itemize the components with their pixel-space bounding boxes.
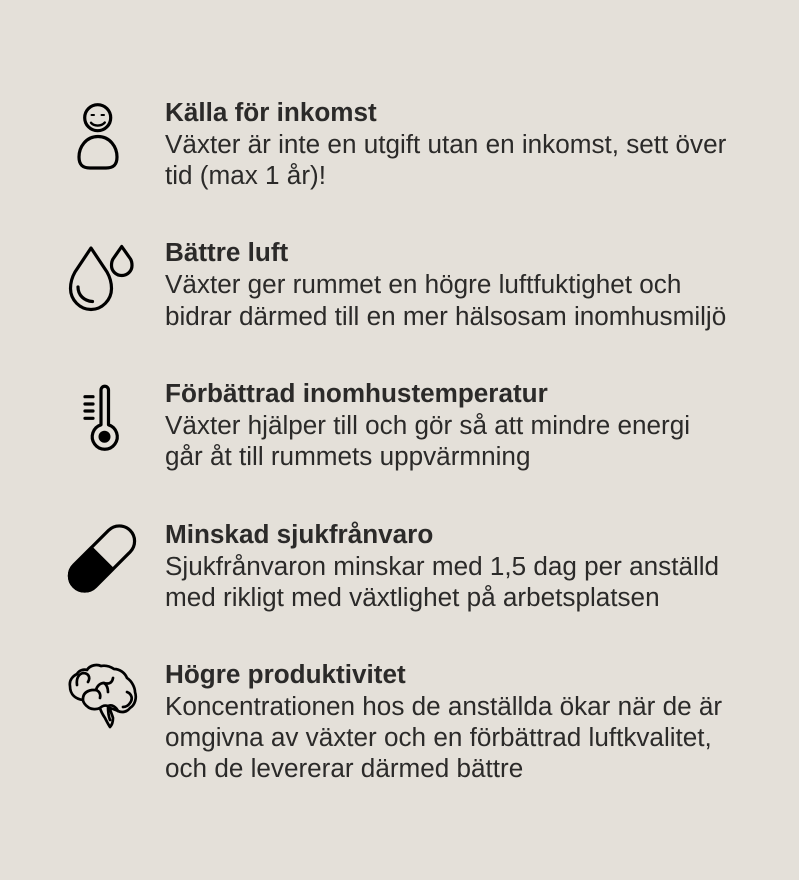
text: Källa för inkomst: [165, 97, 726, 190]
text: Bättre luft: [165, 237, 726, 331]
body line 1: Växter ger rummet en högre luftfuktighet och: [165, 269, 681, 299]
text: Minskad sjukfrånvaro: [165, 519, 719, 612]
icon: water drops: [70, 246, 132, 310]
icon: thermometer: [85, 386, 117, 449]
body line 2: med rikligt med växtlighet på arbetsplatsen: [165, 582, 660, 612]
body line 1: Växter är inte en utgift utan en inkomst, sett över: [165, 129, 726, 159]
heading: Minskad sjukfrånvaro: [165, 519, 433, 549]
body line 2: går åt till rummets uppvärmning: [165, 441, 530, 471]
heading: Bättre luft: [165, 237, 288, 267]
text: Högre produktivitet: [165, 659, 722, 783]
body line 2: omgivna av växter och en förbättrad luftkvalitet,: [165, 722, 712, 752]
body line 2: tid (max 1 år)!: [165, 160, 326, 190]
body line 1: Växter hjälper till och gör så att mindre energi: [165, 410, 690, 440]
heading: Förbättrad inomhustemperatur: [165, 378, 548, 408]
heading: Högre produktivitet: [165, 659, 406, 689]
body line 1: Koncentrationen hos de anställda ökar när de är: [165, 691, 722, 721]
body line 3: och de levererar därmed bättre: [165, 753, 523, 783]
icon: brain: [70, 665, 136, 727]
heading: Källa för inkomst: [165, 97, 377, 127]
icon: capsule: [63, 520, 141, 597]
body line 1: Sjukfrånvaron minskar med 1,5 dag per anställd: [165, 551, 719, 581]
body line 2: bidrar därmed till en mer hälsosam inomhusmiljö: [165, 301, 726, 331]
icon: smiling person: [79, 105, 117, 168]
text: Förbättrad inomhustemperatur: [165, 378, 690, 471]
